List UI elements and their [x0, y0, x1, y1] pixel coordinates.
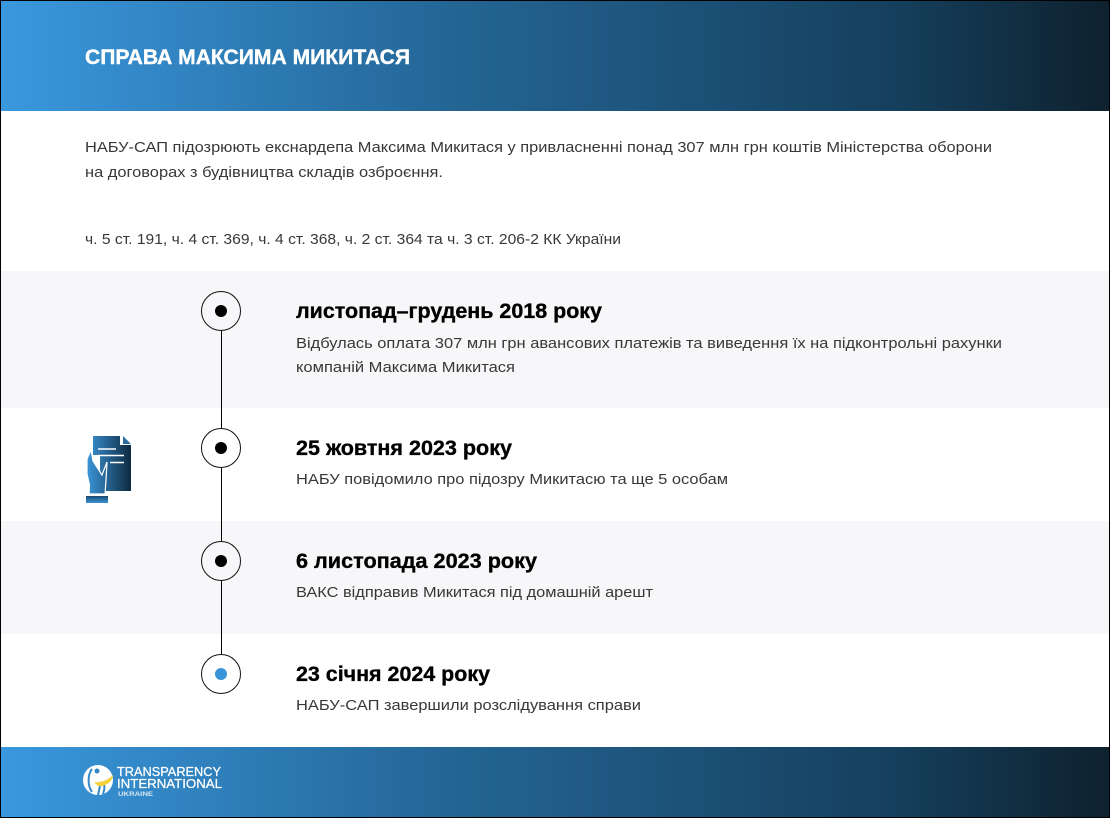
event 4: 23 січня 2024 року	[296, 663, 490, 686]
logo: Transparency International Ukraine	[83, 765, 222, 798]
event 1: компаній Максима Микитася	[296, 359, 515, 376]
timeline line	[220, 311, 222, 674]
title: СПРАВА МАКСИМА МИКИТАСЯ	[85, 46, 410, 69]
intro text: на договорах з будівництва складів озброєння.	[85, 164, 443, 181]
timeline marker 4	[202, 654, 240, 694]
event 3: ВАКС відправив Микитася під домашній арешт	[296, 584, 653, 601]
event 1: Відбулась оплата 307 млн грн авансових платежів та виведення їх на підконтрольні рахунки	[296, 335, 1002, 352]
footer band	[1, 747, 1109, 817]
event 4	[296, 663, 641, 714]
event 3: 6 листопада 2023 року	[296, 550, 537, 573]
logo: Transparency International Ukraine: INTERNATIONAL	[117, 777, 222, 791]
header band	[1, 1, 1109, 111]
event 3	[296, 550, 653, 601]
legal articles: ч. 5 ст. 191, ч. 4 ст. 369, ч. 4 ст. 368, ч. 2 ст. 364 та ч. 3 ст. 206-2 КК України	[85, 231, 621, 248]
icon: hand holding document	[86, 436, 131, 503]
logo: Transparency International Ukraine: TRANSPARENCY	[117, 765, 222, 779]
timeline marker 3	[202, 542, 240, 580]
timeline marker 1	[202, 292, 240, 330]
timeline marker 2	[202, 428, 240, 468]
row band 1	[1, 271, 1109, 408]
logo: Transparency International Ukraine: UKRAINE	[118, 791, 154, 798]
event 1	[296, 300, 1002, 376]
event 2: 25 жовтня 2023 року	[296, 437, 512, 460]
event 2	[296, 437, 728, 488]
event 2: НАБУ повідомило про підозру Микитасю та ще 5 особам	[296, 471, 728, 488]
row band 3	[1, 521, 1109, 634]
intro text	[85, 139, 992, 181]
event 4: НАБУ-САП завершили розслідування справи	[296, 697, 641, 714]
intro text: НАБУ-САП підозрюють екснардепа Максима Микитася у привласненні понад 307 млн грн коштів Міністерства оборони	[85, 139, 992, 156]
event 1: листопад–грудень 2018 року	[296, 300, 602, 323]
